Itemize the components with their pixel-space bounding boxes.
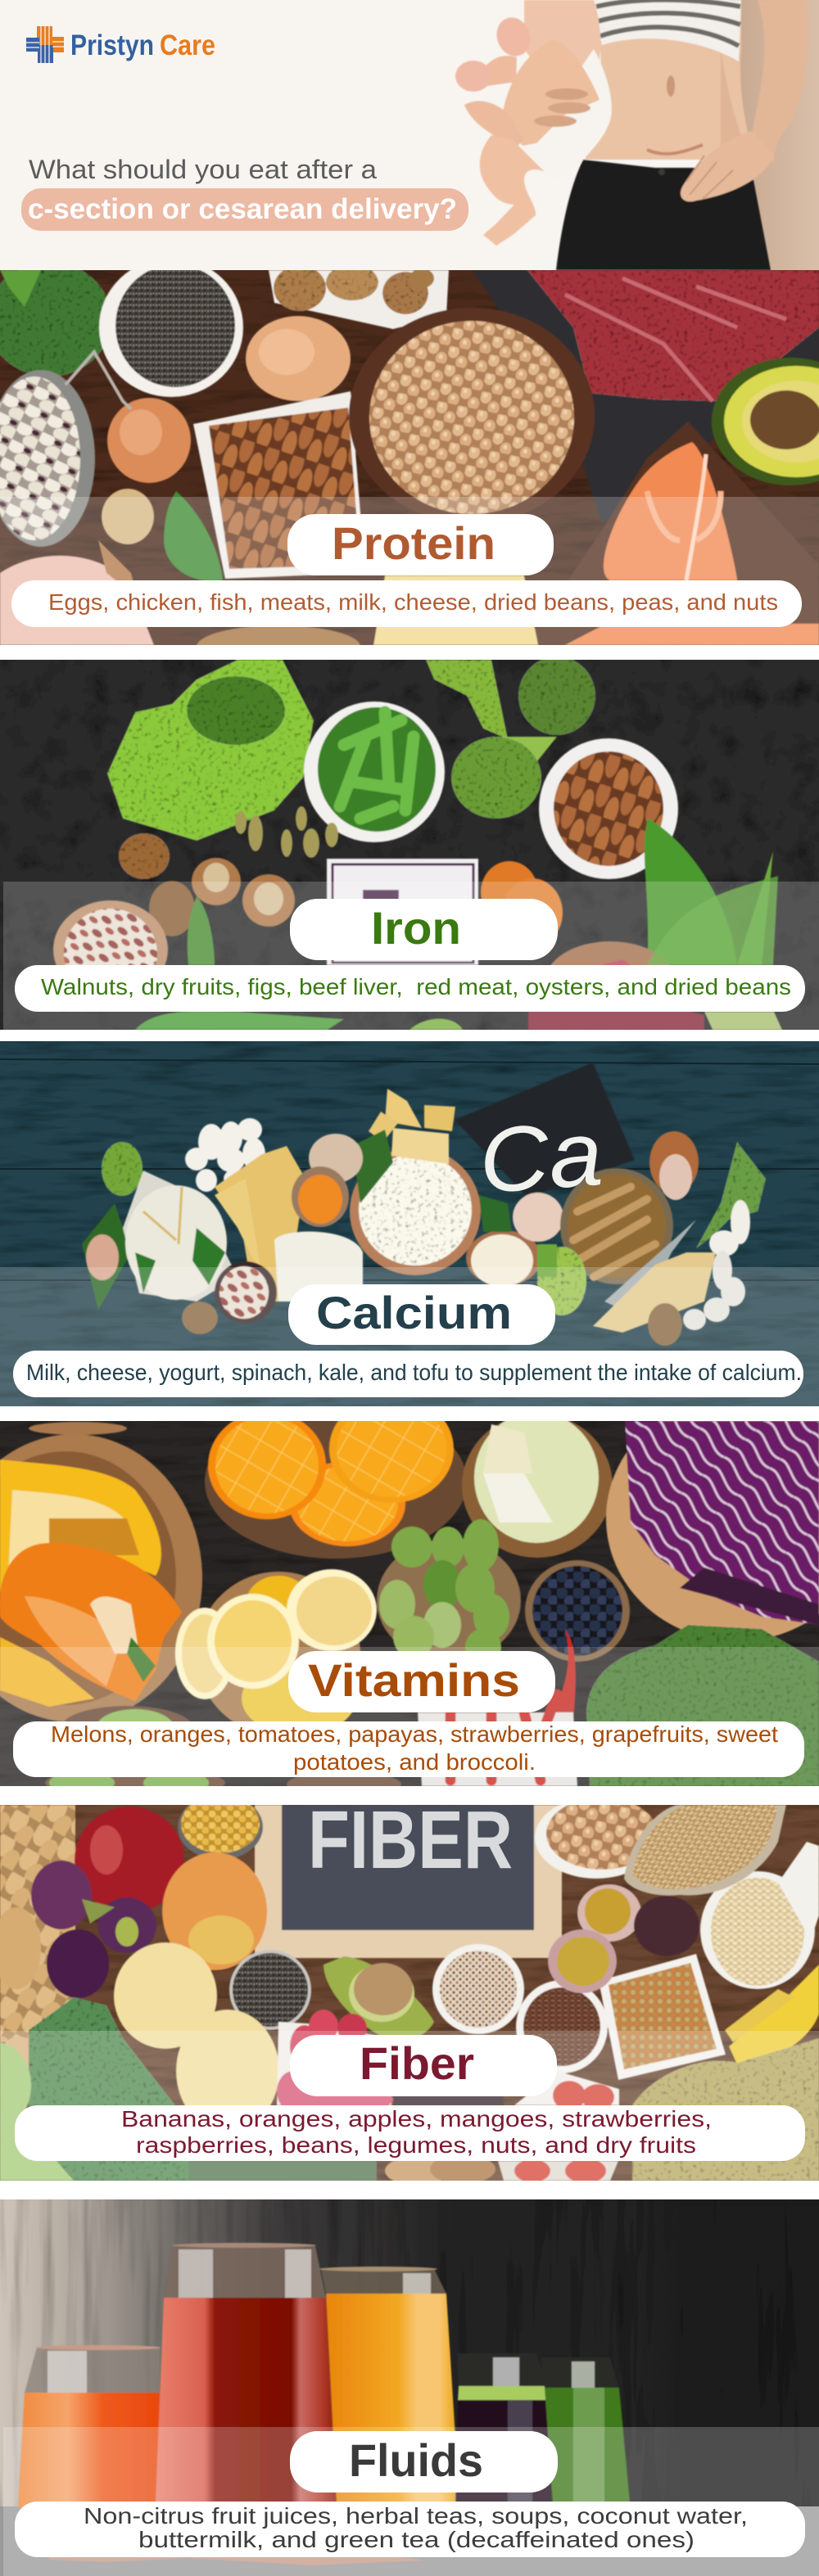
title pill: Fluids	[349, 2434, 483, 2486]
chalk element symbol: Ca	[476, 1102, 605, 1212]
panel: protein	[0, 258, 819, 668]
header background and mother photo	[0, 0, 819, 270]
description pill: Walnuts, dry fruits, figs, beef liver, red meat, oysters, and dried beans	[41, 974, 791, 999]
fluids juice photo	[0, 2199, 819, 2576]
panel: vitamins	[0, 1395, 819, 1798]
title pill: Fiber	[360, 2037, 474, 2089]
panel: fluids	[0, 2199, 819, 2576]
title pill	[288, 1651, 555, 1712]
description pill: Melons, oranges, tomatoes, papayas, strawberries, grapefruits, sweet	[51, 1721, 778, 1747]
translucent overlay band	[3, 882, 819, 1030]
panel: iron	[0, 656, 819, 1030]
heading line one: What should you eat after a	[29, 155, 377, 184]
translucent overlay band	[0, 1267, 819, 1406]
description pill	[15, 965, 805, 1012]
description pill	[15, 2105, 805, 2161]
iron food photo	[0, 656, 819, 1030]
title pill: Iron	[371, 902, 461, 954]
chalk word on board: FIBER	[308, 1794, 513, 1886]
fiber food photo	[0, 1794, 819, 2186]
title pill	[287, 514, 554, 575]
panel: header	[0, 0, 819, 270]
translucent overlay band	[3, 2427, 819, 2576]
description pill	[13, 1351, 803, 1397]
description pill: Bananas, oranges, apples, mangoes, strawberries,	[121, 2106, 712, 2132]
logo wordmark: Pristyn	[70, 29, 154, 61]
description pill	[11, 580, 802, 627]
panel: calcium	[0, 1041, 819, 1406]
icon: medical cross	[26, 26, 64, 63]
heading pill: c-section or cesarean delivery?	[28, 193, 457, 225]
panel: fiber	[0, 1794, 819, 2186]
vitamins food photo	[0, 1395, 819, 1798]
title pill	[290, 2035, 557, 2096]
title pill: Protein	[332, 517, 495, 569]
description pill: raspberries, beans, legumes, nuts, and dry fruits	[136, 2132, 696, 2158]
description pill: Non-citrus fruit juices, herbal teas, soups, coconut water,	[84, 2503, 748, 2529]
protein food photo	[0, 258, 819, 668]
translucent overlay band	[0, 2031, 819, 2181]
description pill	[13, 1721, 804, 1777]
logo wordmark: care: Care	[160, 29, 215, 61]
title pill: Vitamins	[308, 1654, 520, 1706]
title pill	[290, 899, 558, 960]
calcium food photo	[0, 1041, 819, 1406]
translucent overlay band	[0, 1647, 819, 1786]
title pill: Calcium	[316, 1287, 512, 1338]
description pill: Eggs, chicken, fish, meats, milk, cheese, dried beans, peas, and nuts	[48, 589, 778, 615]
title pill	[290, 2431, 558, 2493]
description pill: buttermilk, and green tea (decaffeinated ones)	[138, 2527, 695, 2552]
translucent overlay band	[0, 497, 819, 645]
title pill	[288, 1284, 555, 1345]
logo	[26, 26, 154, 63]
description pill: potatoes, and broccoli.	[293, 1749, 536, 1775]
description pill	[15, 2502, 805, 2557]
